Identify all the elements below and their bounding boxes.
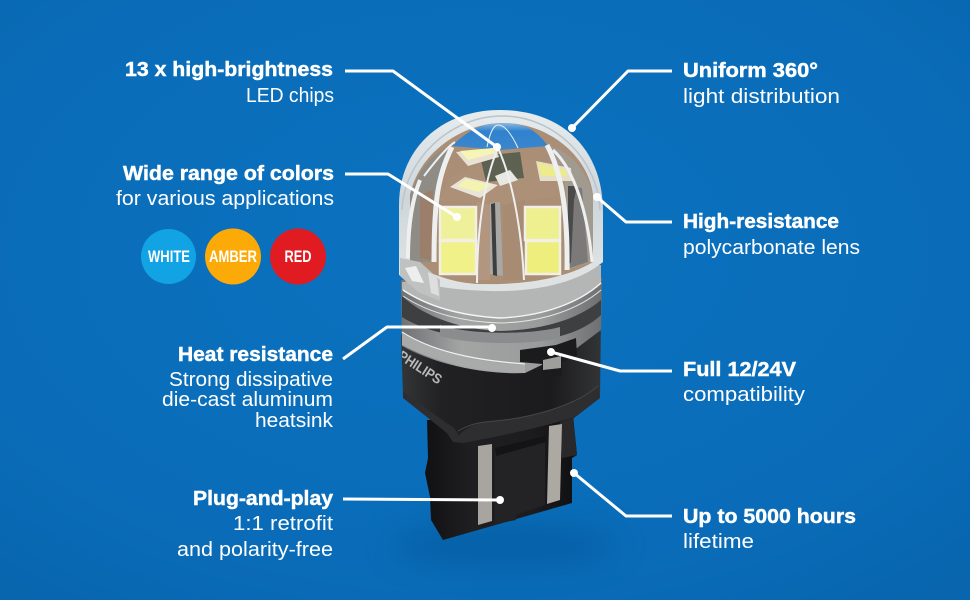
connector plug — [425, 415, 577, 540]
lens base collar — [400, 258, 603, 291]
text: heat resistance — [162, 344, 334, 432]
badge: white: WHITE — [148, 247, 190, 266]
text: heat resistance: Strong dissipative — [169, 369, 333, 391]
LED chips — [440, 148, 572, 274]
text: lifetime: Up to 5000 hours — [683, 506, 856, 528]
metal contact left — [478, 444, 492, 525]
text: lifetime: lifetime — [683, 531, 754, 553]
text: heat resistance: die-cast aluminum — [162, 389, 333, 411]
badge: red — [270, 228, 326, 284]
text: heat resistance: Heat resistance — [178, 344, 333, 366]
text: lifetime — [683, 506, 856, 553]
text: heat resistance: heatsink — [255, 410, 334, 432]
text: colors — [116, 163, 334, 210]
text: LED chips: LED chips — [246, 85, 334, 107]
badge: white — [141, 229, 196, 284]
polycarbonate dome — [399, 110, 603, 301]
shadow under bulb — [390, 525, 620, 565]
color badges — [141, 228, 326, 284]
brand label: PHILIPS — [395, 347, 445, 387]
text: uniform: Uniform 360° — [683, 60, 818, 82]
bulb illustration — [399, 110, 604, 568]
text: plug and play: Plug-and-play — [193, 488, 334, 510]
text: plug and play: 1:1 retrofit — [233, 513, 333, 535]
lens ribs — [408, 125, 592, 283]
badge: amber — [205, 228, 261, 284]
text: voltage: Full 12/24V — [683, 359, 797, 381]
heatsink — [401, 265, 602, 377]
metal contact right — [547, 424, 562, 504]
text: plug and play: and polarity-free — [177, 539, 333, 561]
callout lines — [343, 71, 672, 516]
clip — [520, 338, 577, 377]
text: uniform: light distribution — [683, 86, 840, 108]
badge: red: RED — [284, 247, 312, 266]
text: colors: Wide range of colors — [123, 163, 334, 185]
text: LED chips — [125, 59, 334, 107]
callout dots — [453, 124, 601, 504]
text: lens: polycarbonate lens — [683, 237, 860, 259]
text: voltage: compatibility — [683, 384, 805, 406]
text: plug and play — [177, 488, 334, 561]
text: lens — [683, 211, 860, 259]
text: LED chips: 13 x high-brightness — [125, 59, 333, 81]
text: lens: High-resistance — [683, 211, 839, 233]
dome interior — [410, 123, 593, 284]
text: voltage — [683, 359, 805, 406]
badge: amber: AMBER — [209, 247, 257, 266]
text: uniform — [683, 60, 840, 108]
black base — [401, 330, 601, 443]
text: colors: for various applications — [116, 188, 334, 210]
